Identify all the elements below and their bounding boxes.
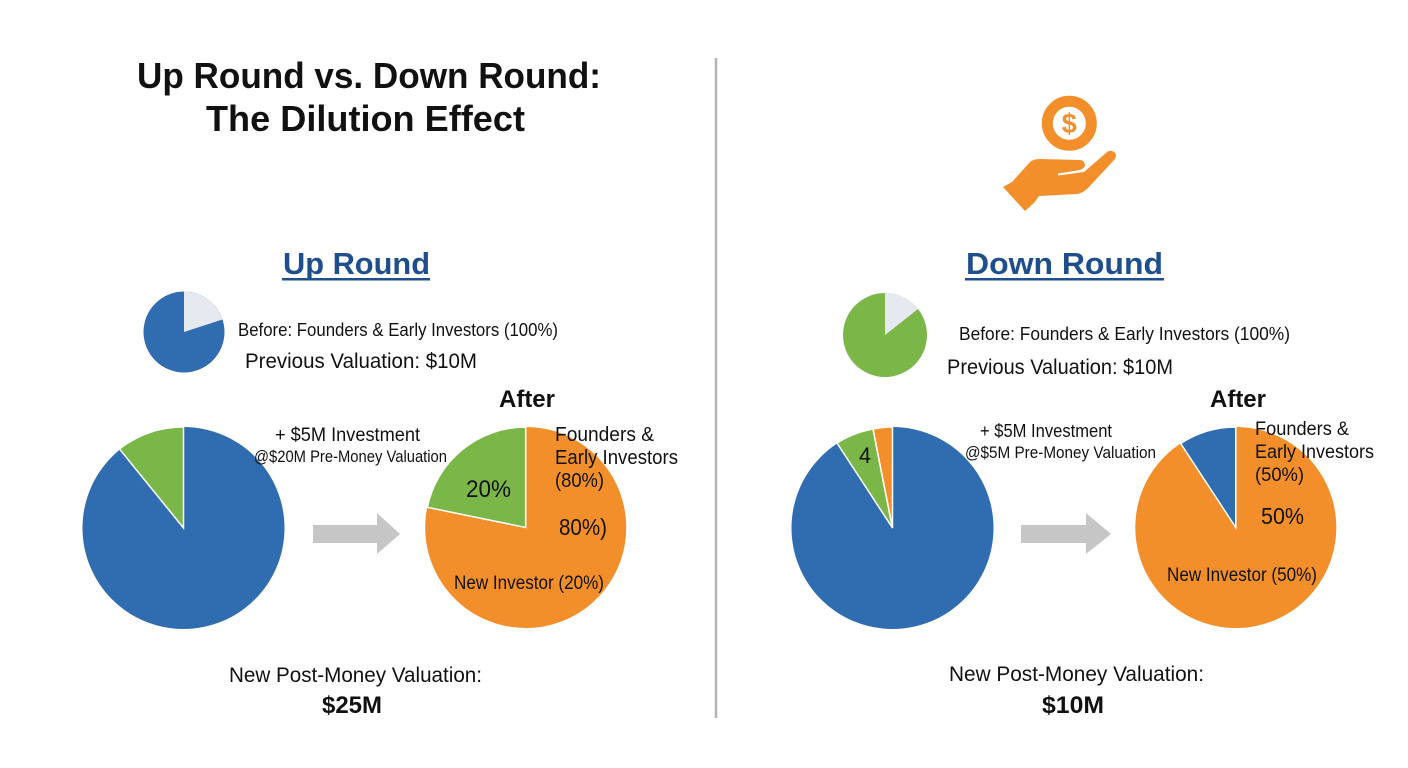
- founders label, down round: (50%): [1255, 464, 1304, 486]
- post-money valuation, down round: New Post-Money Valuation:: [949, 662, 1204, 686]
- post-money valuation, up round: New Post-Money Valuation:: [229, 663, 482, 687]
- pie: after, up round: 80%): [559, 514, 607, 540]
- pie: after, up round: [425, 427, 626, 628]
- pie: before, down round: [843, 293, 927, 377]
- pie: after, down round: 50%: [1261, 503, 1304, 529]
- pie: investment, down round: 4: [859, 443, 871, 468]
- founders label, up round: Early Investors: [555, 447, 678, 469]
- investment label, up round: + $5M Investment: [275, 425, 421, 446]
- post-money valuation, down round: [949, 662, 1204, 719]
- post-money valuation, up round: $25M: [322, 692, 382, 719]
- pie: after, down round: New Investor (50%): [1167, 565, 1317, 586]
- pie: investment, down round: [792, 427, 994, 629]
- pie: after, up round: New Investor (20%): [454, 573, 604, 594]
- heading: down round: Down Round: [966, 246, 1163, 281]
- pie: before, up round: [144, 292, 224, 372]
- founders label, down round: Founders &: [1255, 418, 1349, 440]
- pie: after, up round: 20%: [466, 476, 511, 503]
- founders label, down round: Early Investors: [1255, 441, 1374, 463]
- investment label, down round: + $5M Investment: [980, 421, 1112, 441]
- icon: hand holding dollar coin: [1003, 101, 1116, 211]
- previous valuation, up round: Previous Valuation: $10M: [245, 349, 477, 373]
- founders label, up round: (80%): [555, 470, 604, 492]
- arrow, up round: [313, 513, 400, 554]
- after heading, up round: After: [499, 386, 555, 413]
- pie: after, down round: [1135, 427, 1336, 628]
- before label, down round: Before: Founders & Early Investors (100%): [959, 323, 1290, 344]
- after heading, down round: After: [1210, 386, 1266, 413]
- heading: up round: Up Round: [283, 246, 430, 281]
- founders label, up round: Founders &: [555, 424, 655, 446]
- investment label, down round: [965, 421, 1156, 462]
- pie: investment, up round: [82, 427, 284, 629]
- founders label, down round: [1255, 418, 1374, 486]
- icon: hand holding dollar coin: $: [1062, 108, 1077, 139]
- panel: up round: [82, 246, 678, 719]
- before label, up round: Before: Founders & Early Investors (100%): [238, 320, 558, 340]
- panel: down round: [792, 246, 1374, 719]
- investment label, down round: @$5M Pre-Money Valuation: [965, 444, 1156, 462]
- title: The Dilution Effect: [206, 98, 525, 139]
- title: Up Round vs. Down Round:: [137, 55, 601, 96]
- founders label, up round: [555, 424, 678, 492]
- investment label, up round: @$20M Pre-Money Valuation: [254, 448, 447, 466]
- investment label, up round: [254, 425, 447, 466]
- post-money valuation, up round: [229, 663, 482, 719]
- arrow, down round: [1021, 513, 1111, 554]
- post-money valuation, down round: $10M: [1042, 692, 1104, 719]
- title: [137, 55, 601, 139]
- previous valuation, down round: Previous Valuation: $10M: [947, 355, 1173, 379]
